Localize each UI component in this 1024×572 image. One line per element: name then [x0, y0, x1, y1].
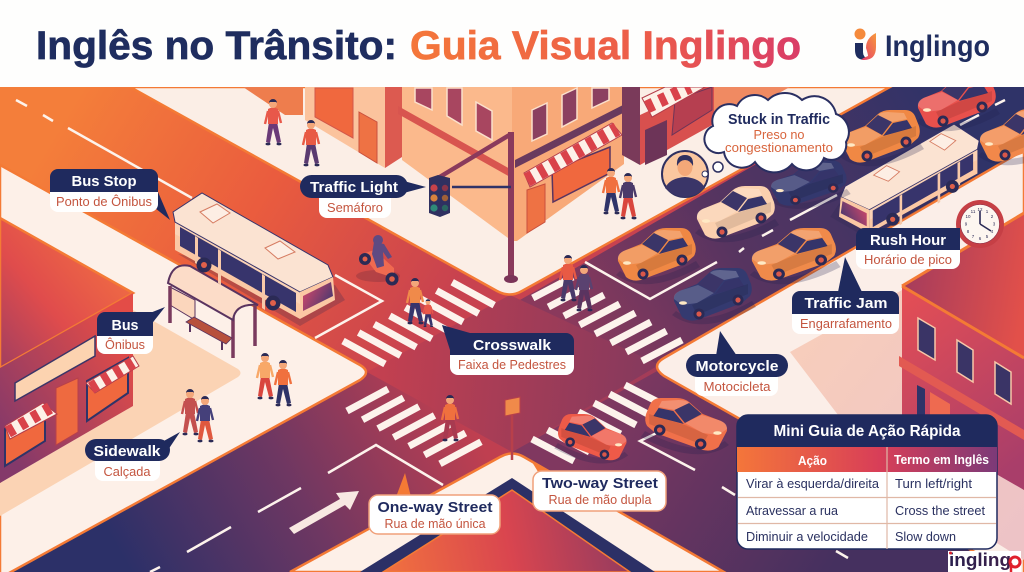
- label: Traffic Jam: Traffic Jam: [804, 295, 888, 312]
- label: Motorcycle: Motocicleta: [704, 379, 771, 394]
- building: west storefront: [0, 218, 139, 483]
- label: Two-way Street: Rua de mão dupla: [548, 492, 652, 507]
- panel heading: Mini Guia de Ação Rápida: [774, 423, 961, 440]
- label: Motorcycle: Motorcycle: [696, 358, 778, 375]
- label: Bus: Ônibus: [105, 337, 145, 352]
- callout: Stuck in Traffic: congestionamento: [725, 140, 833, 155]
- bench: [186, 317, 232, 350]
- table row: cross: Cross the street: [895, 503, 985, 518]
- label: Bus: [97, 307, 165, 354]
- label: One-way Street: Rua de mão única: [384, 516, 486, 531]
- label and icon: Rush Hour clock: 6: [979, 236, 982, 241]
- crosswalk: southeast: [532, 385, 660, 461]
- table header row: [737, 447, 997, 472]
- table header row: Termo em Inglês: [894, 452, 989, 467]
- callout: Stuck in Traffic: Stuck in Traffic: [728, 111, 830, 128]
- label and icon: Rush Hour clock: 8: [967, 229, 970, 234]
- street sign: [505, 397, 520, 460]
- icon: driver in circle: [662, 151, 723, 197]
- pedestrians: [182, 99, 636, 442]
- title: Inglês no Trânsito:: [36, 24, 397, 68]
- label and icon: Rush Hour clock: 12: [977, 207, 983, 212]
- label: Crosswalk: Crosswalk: [473, 337, 552, 354]
- lane markings: [16, 100, 1005, 572]
- label and icon: Rush Hour clock: Rush Hour: [870, 232, 946, 249]
- crosswalk: northeast: [533, 277, 682, 361]
- label: Traffic Light: Semáforo: [327, 200, 383, 215]
- label: One-way Street: One-way Street: [378, 499, 492, 516]
- label: Traffic Jam: [792, 257, 899, 334]
- panel heading: [737, 415, 997, 447]
- cars: at intersection: [554, 398, 729, 464]
- label: One-way Street: [369, 473, 500, 534]
- crosswalk: northwest: [343, 282, 494, 364]
- table row: turn: Virar à esquerda/direita: [746, 476, 880, 491]
- logo: Inglingo: [854, 28, 990, 63]
- label: Traffic Light: Traffic Light: [310, 179, 398, 196]
- logo: Inglingo: Inglingo: [885, 30, 990, 63]
- label: Bus Stop: [50, 169, 170, 220]
- label and icon: Rush Hour clock: 10: [965, 214, 971, 219]
- label and icon: Rush Hour clock: Horário de pico: [864, 252, 952, 267]
- callout: Stuck in Traffic: [704, 93, 849, 172]
- label and icon: Rush Hour clock: 7: [972, 234, 975, 239]
- label: Motorcycle: [686, 331, 788, 396]
- motorcycle with rider: [356, 235, 400, 286]
- label: Traffic Light: [300, 175, 426, 218]
- buildings: north block: [243, 87, 790, 241]
- table row: cross: [746, 503, 985, 518]
- label: Sidewalk: Sidewalk: [94, 443, 161, 460]
- table row: cross: Atravessar a rua: [746, 503, 839, 518]
- label and icon: Rush Hour clock: 5: [986, 234, 989, 239]
- watermark: ingling: [949, 550, 1011, 570]
- label and icon: Rush Hour clock: 2: [991, 214, 994, 219]
- label: Sidewalk: [85, 432, 180, 481]
- callout: Stuck in Traffic: Preso no: [754, 127, 804, 142]
- crosswalk: southwest: [347, 389, 481, 464]
- header band: [0, 0, 1024, 87]
- label: Bus Stop: Ponto de Ônibus: [56, 194, 152, 209]
- table header row: Ação: [798, 453, 827, 468]
- label and icon: Rush Hour clock: 3: [993, 222, 996, 226]
- label: Crosswalk: Faixa de Pedestres: [458, 357, 566, 372]
- title: Guia Visual Inglingo: [410, 24, 801, 68]
- table row: slow: Diminuir a velocidade: [746, 529, 868, 544]
- title: [36, 24, 801, 68]
- label: Traffic Jam: Engarrafamento: [800, 316, 892, 331]
- sidewalk: north block: [130, 87, 890, 294]
- label and icon: Rush Hour clock: 9: [965, 222, 968, 226]
- label: Two-way Street: [532, 462, 666, 511]
- sidewalk and building: south block: [290, 454, 724, 572]
- bus: in traffic: [830, 124, 979, 239]
- building: east corner: [899, 213, 1024, 490]
- label: Two-way Street: Two-way Street: [542, 475, 658, 492]
- label and icon: Rush Hour clock: 1: [986, 209, 989, 214]
- bus: at stop: [173, 193, 345, 326]
- label: Crosswalk: [442, 325, 574, 375]
- table row: slow: [746, 529, 956, 544]
- table row: slow: Slow down: [895, 529, 956, 544]
- table row: turn: [746, 476, 972, 491]
- label: Bus Stop: Bus Stop: [72, 173, 136, 190]
- icon: one-way arrow: [289, 491, 359, 534]
- table row: turn: Turn left/right: [895, 476, 972, 491]
- label: Sidewalk: Calçada: [104, 464, 151, 479]
- cars: traffic jam queue: [616, 75, 1024, 324]
- panel: Mini Guia de Ação Rápida: [737, 415, 997, 549]
- label and icon: Rush Hour clock: 4: [991, 229, 994, 234]
- peach bus stop pad: [0, 310, 240, 516]
- label: Bus: Bus: [112, 317, 138, 334]
- label and icon: Rush Hour clock: [856, 200, 1004, 269]
- icon: traffic light: [429, 175, 450, 217]
- sidewalk: west block: [0, 165, 366, 572]
- traffic light pole: [438, 132, 518, 283]
- logo icon: [854, 28, 876, 60]
- label and icon: Rush Hour clock: 11: [971, 209, 976, 214]
- sidewalk: east block: [657, 150, 1024, 572]
- bus shelter: [168, 265, 258, 358]
